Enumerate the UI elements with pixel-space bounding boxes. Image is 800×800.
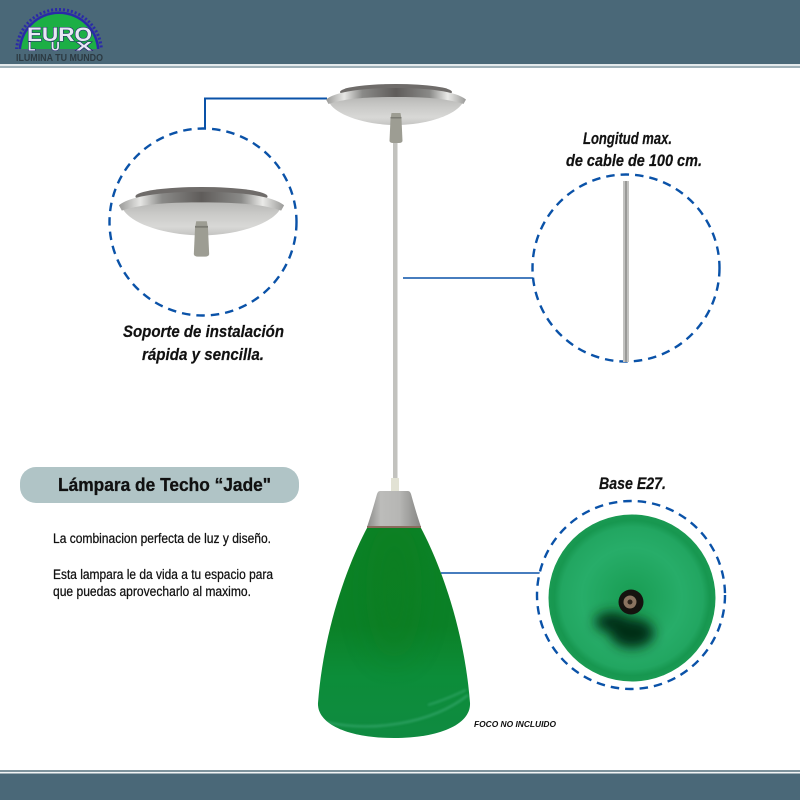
green glass [318, 528, 470, 738]
description text: Esta lampara le da vida a tu espacio para [53, 567, 273, 582]
caption: cable length [566, 129, 702, 170]
connector: canopy to left circle [205, 98, 327, 129]
caption: canopy: Soporte de instalación [123, 322, 284, 341]
lamp shade [318, 478, 470, 738]
connector: glass shade to bottom circle [441, 572, 541, 574]
metal cone [367, 491, 421, 527]
logo: Eurolux [15, 8, 103, 61]
caption: canopy [123, 322, 284, 364]
caption: cable length: Longitud max. [583, 129, 672, 148]
caption: base: Base E27. [599, 474, 666, 493]
circle: base E27 detail [537, 501, 725, 689]
metal cone edge [367, 526, 421, 528]
cable strain relief [391, 478, 399, 492]
caption: cable length: de cable de 100 cm. [566, 151, 702, 170]
logo: Eurolux: U [51, 40, 60, 54]
cable [393, 143, 398, 492]
logo: Eurolux: ILUMINA TU MUNDO [16, 53, 103, 64]
circle: cable detail [532, 174, 720, 362]
footer band [0, 770, 800, 800]
circle: canopy detail [110, 128, 296, 316]
header band [0, 0, 800, 68]
interior shadow [595, 612, 654, 648]
description text [53, 531, 273, 599]
green glass disc [548, 514, 716, 682]
logo: Eurolux: EURO [27, 25, 92, 46]
description text: La combinacion perfecta de luz y diseño. [53, 531, 271, 546]
ceiling canopy [326, 84, 466, 143]
note: bulb not included: FOCO NO INCLUIDO [474, 719, 556, 729]
title pill [20, 467, 299, 503]
socket [618, 590, 644, 614]
connector: cable to right circle [403, 277, 533, 279]
caption: canopy: rápida y sencilla. [142, 345, 264, 364]
logo: Eurolux: L [28, 40, 35, 54]
title pill: Lámpara de Techo “Jade" [58, 474, 271, 495]
description text: que puedas aprovecharlo al maximo. [53, 584, 251, 599]
logo: Eurolux: X [76, 40, 92, 54]
